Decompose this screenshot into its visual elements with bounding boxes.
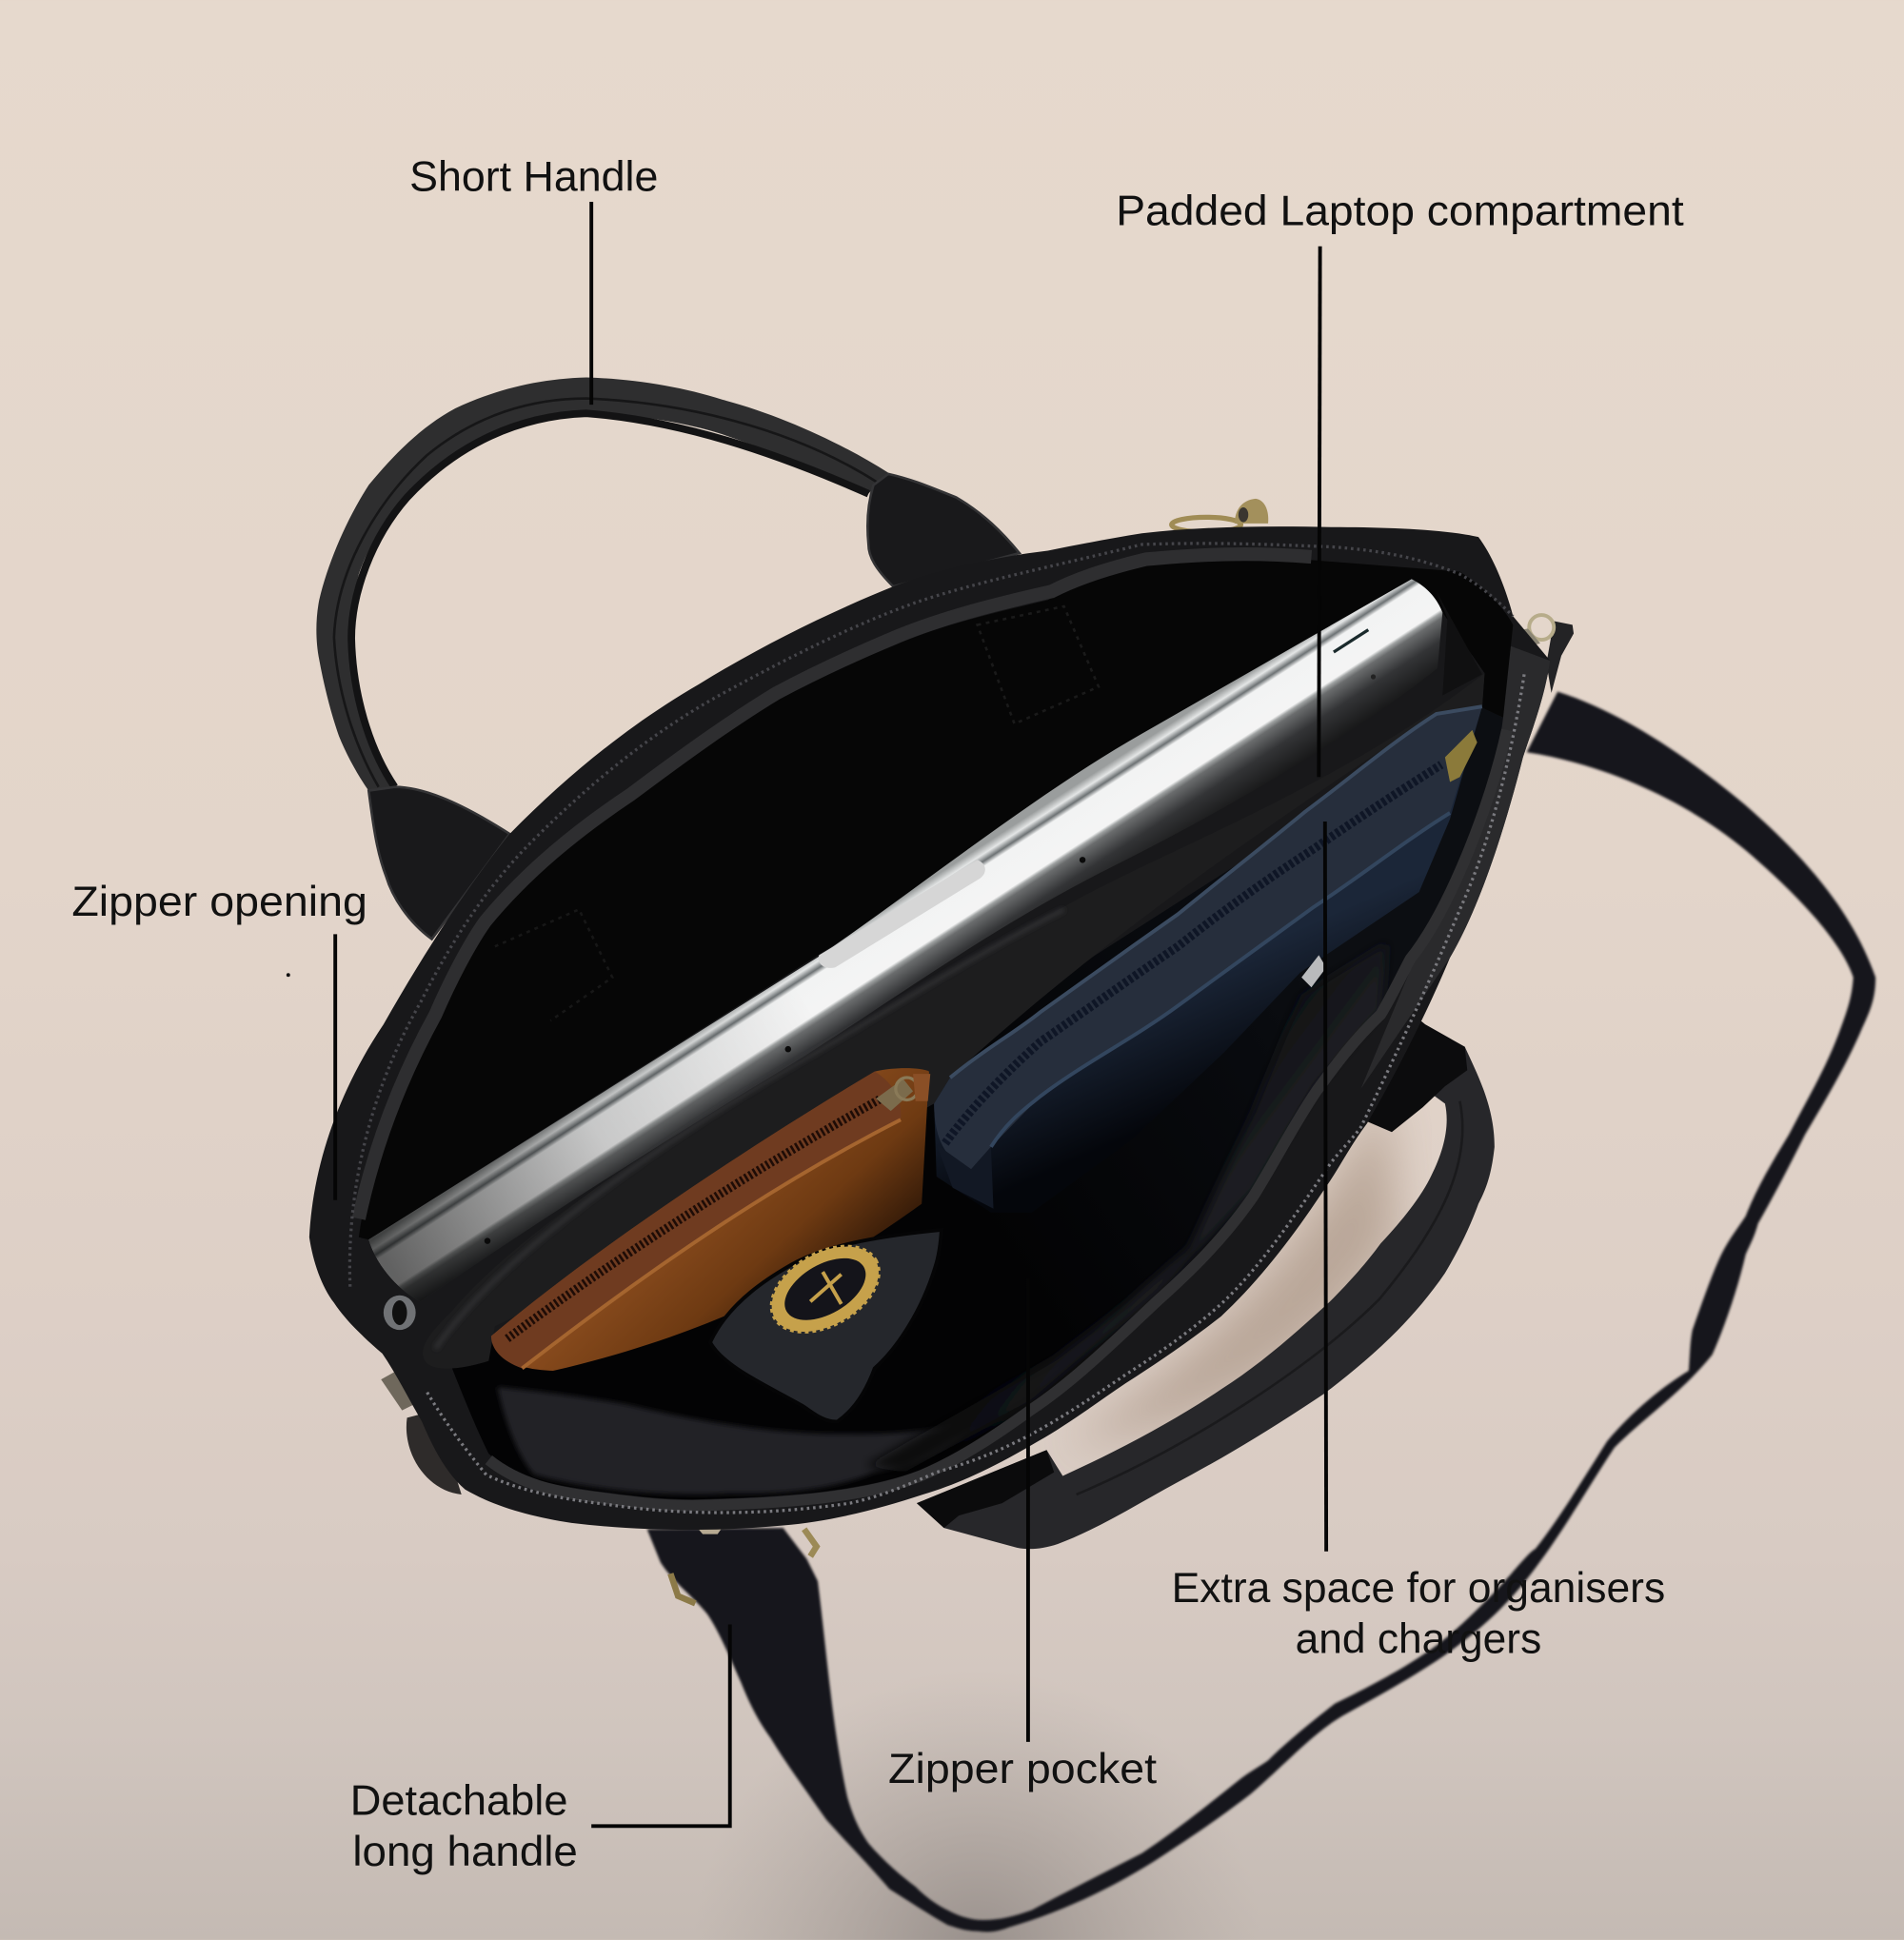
left zip pull: [381, 1361, 426, 1411]
brown wallet: [491, 1068, 930, 1371]
navy organiser: [934, 706, 1482, 1213]
bag body: [309, 526, 1550, 1530]
zipper teeth top: [349, 544, 1513, 1287]
short handle: [316, 378, 1020, 940]
long detachable strap: [647, 692, 1875, 1931]
front zipper teeth: [426, 674, 1524, 1513]
rear handle: [917, 1002, 1495, 1549]
label: extra space: Extra space for organisers: [1172, 1565, 1665, 1612]
top buckle: [1172, 517, 1240, 532]
label: zipper opening: [71, 879, 367, 1200]
lower pocket interior: [426, 674, 1524, 1513]
label: detachable long handle: [350, 1624, 730, 1875]
laptop hinge pin: [384, 1296, 416, 1330]
label: zipper opening: Zipper opening: [71, 879, 367, 925]
right side lining panel: [866, 942, 1387, 1473]
fold at laptop corner: [1437, 591, 1482, 696]
grey pocket lining: [497, 1387, 978, 1495]
laptop: [368, 579, 1442, 1301]
right handle tab: [867, 474, 1020, 586]
right ring and tab: [1546, 622, 1574, 693]
side zip pull: [1301, 955, 1326, 987]
label: extra space: [1172, 822, 1665, 1662]
left handle tab: [368, 787, 509, 940]
sunglasses case: [710, 1229, 942, 1421]
ribbed binding: [359, 554, 1312, 1218]
label: detachable long handle: long handle: [352, 1829, 578, 1875]
bag interior lining: [349, 544, 1513, 1287]
label: zipper pocket: Zipper pocket: [888, 1746, 1157, 1792]
laptop vents and screws: [1334, 630, 1368, 652]
buckles and hardware: [381, 499, 1574, 1603]
padded divider flap: [384, 591, 1484, 1369]
laptop thumb notch: [819, 860, 985, 968]
label: padded laptop compartment: Padded Laptop compartment: [1116, 188, 1684, 235]
soft shadow under bag: [1064, 1089, 1398, 1448]
organiser zip pull: [1445, 730, 1478, 782]
inner pocket binding: [488, 730, 1507, 1506]
navy side ribs: [937, 1144, 994, 1209]
label: short handle: Short Handle: [409, 153, 658, 200]
label: detachable long handle: Detachable: [350, 1778, 567, 1825]
lower strap hardware: [670, 1574, 695, 1603]
gold seal: [757, 1229, 894, 1349]
front zipper rim: [1360, 644, 1550, 1089]
label: extra space: and chargers: [1296, 1615, 1541, 1662]
wallet zip pull: [876, 1079, 913, 1111]
